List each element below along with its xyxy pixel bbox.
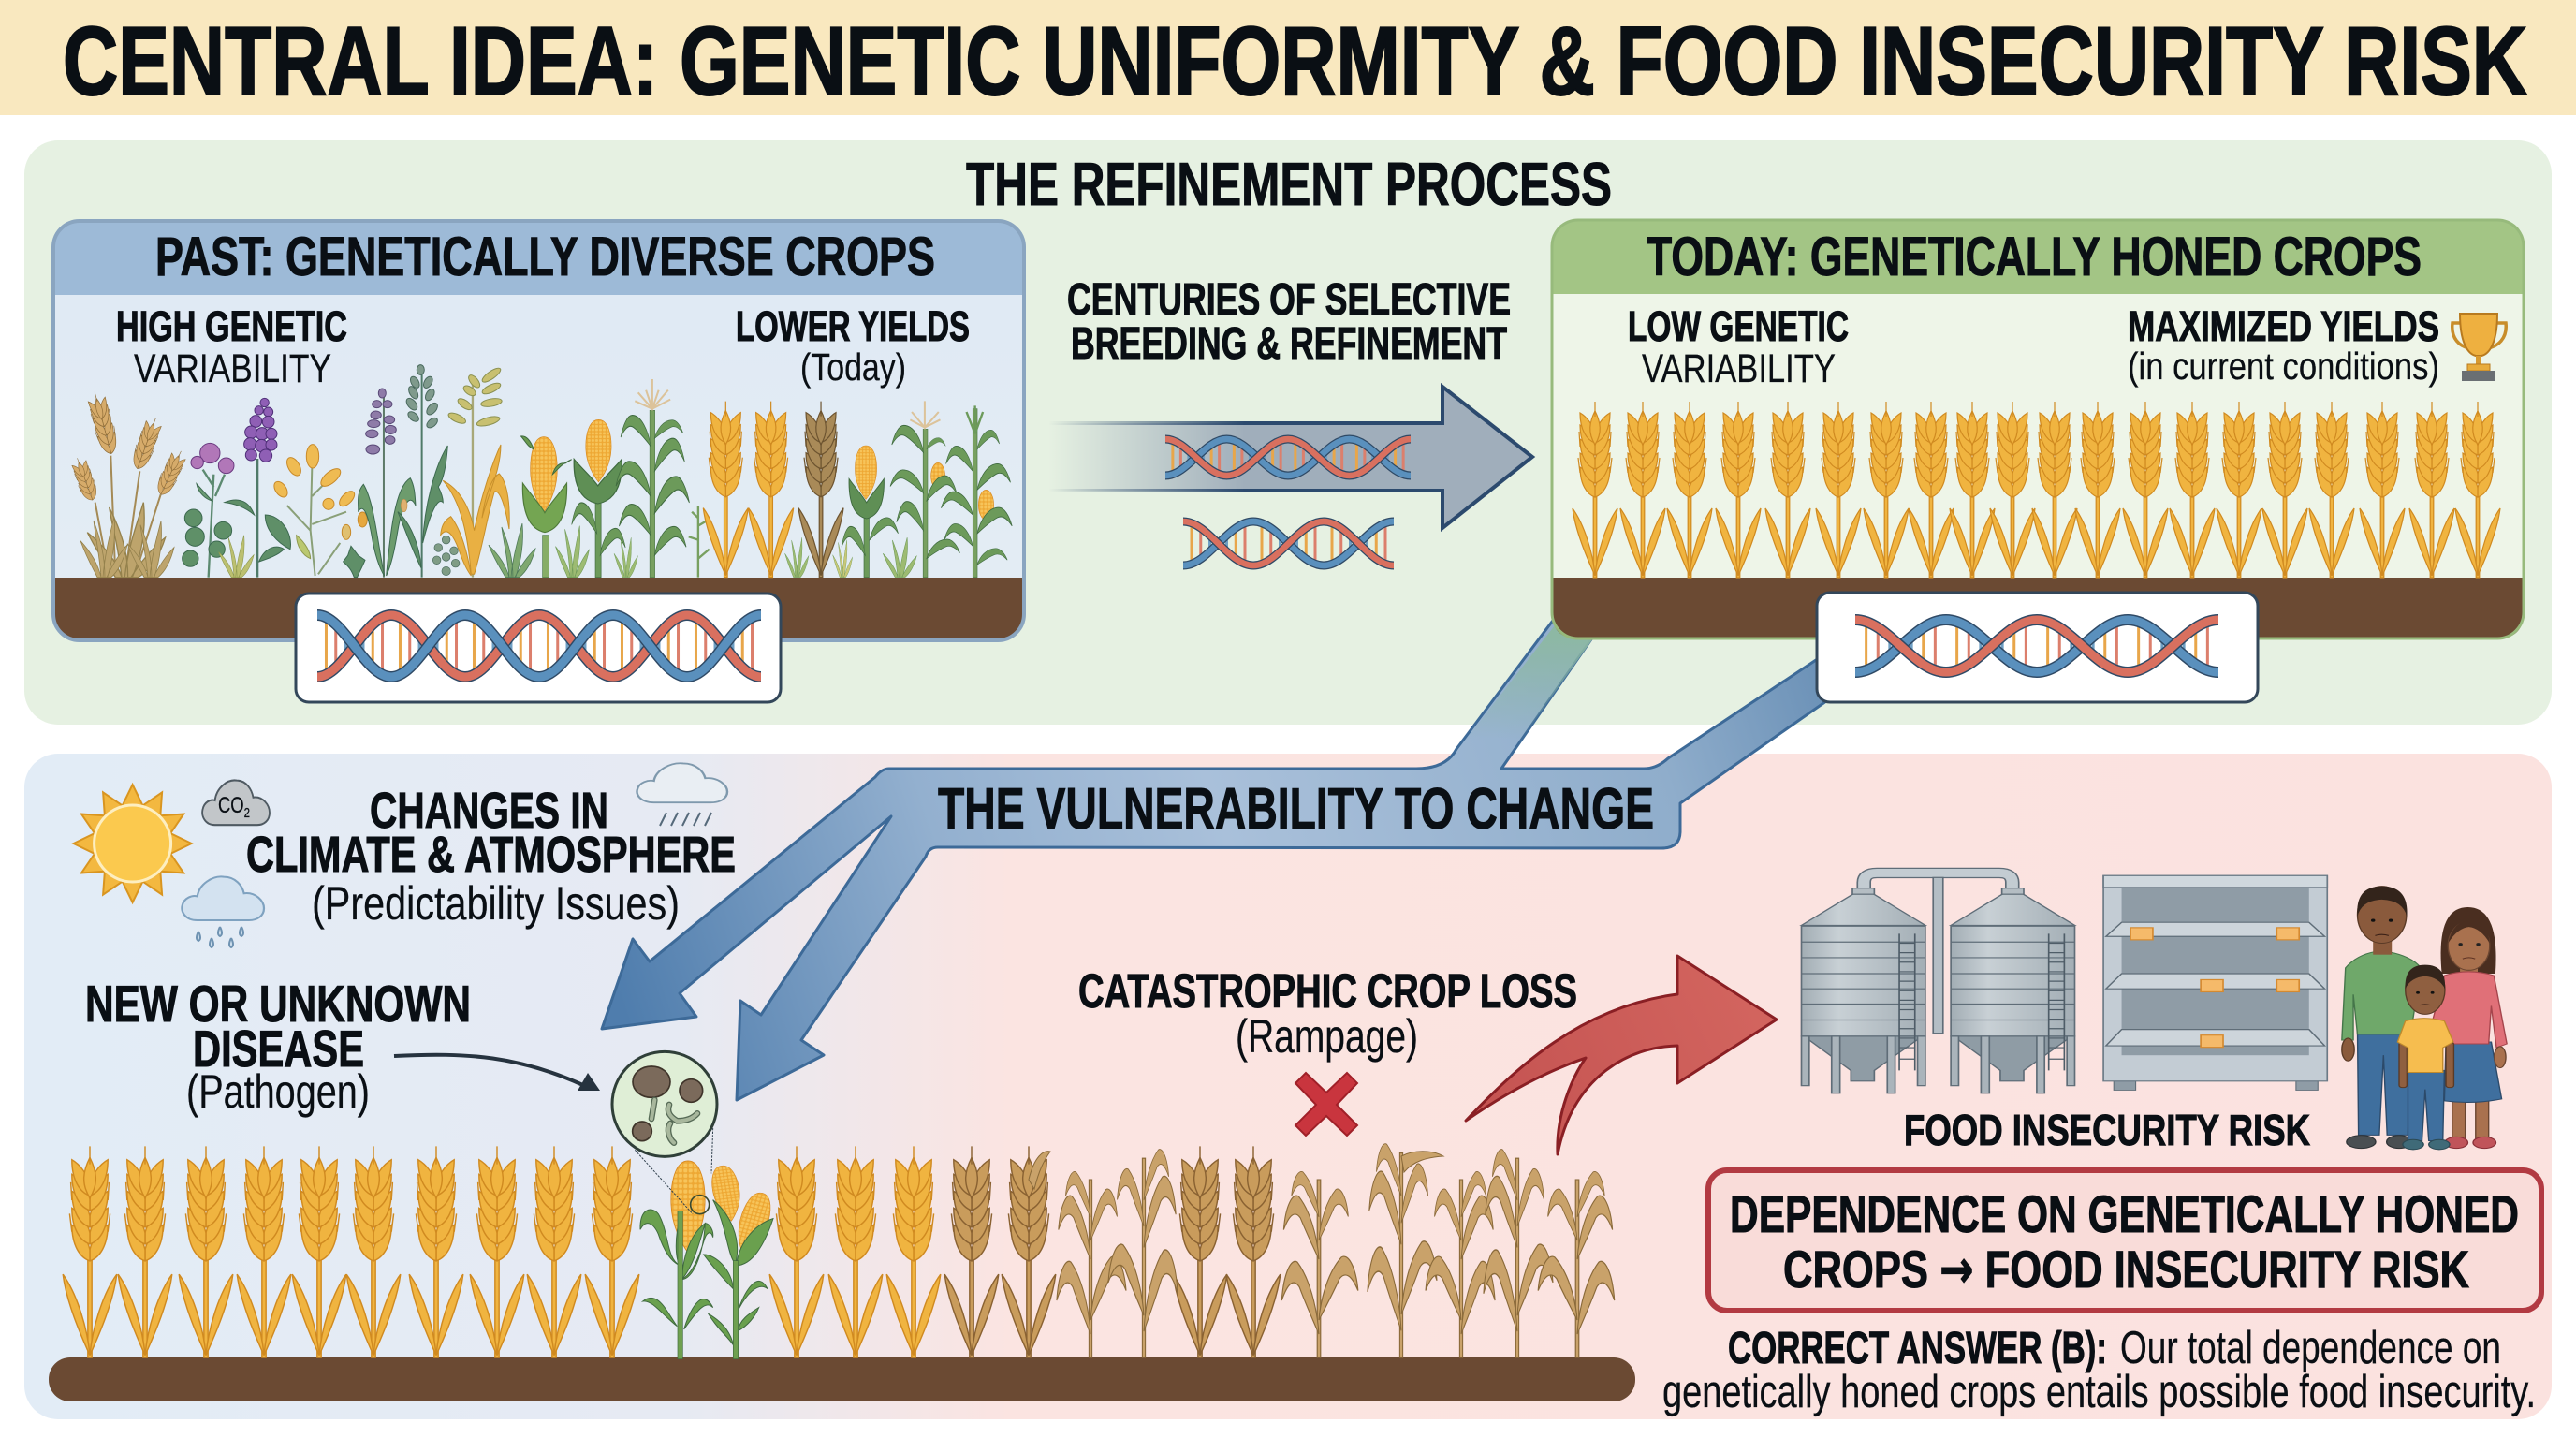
label: new or unknown disease: DISEASE (193, 1020, 364, 1078)
maximized yields label: (in current conditions) (2128, 345, 2439, 388)
icon: sun (74, 785, 192, 902)
arrow: the vulnerability to change (602, 618, 1835, 1100)
lower yields label: (Today) (800, 345, 906, 389)
high genetic variability label: HIGH GENETIC (116, 302, 347, 350)
boy (2397, 965, 2453, 1150)
label: food insecurity risk: FOOD INSECURITY RISK (1904, 1106, 2310, 1154)
healthy wheat row (63, 1146, 941, 1357)
panel: today genetically honed crops (1552, 220, 2524, 702)
infected spot (691, 1196, 710, 1214)
arrow: refinement (1048, 387, 1532, 528)
dna helix: diverse (317, 615, 761, 677)
diverse plants right group (521, 379, 1012, 578)
panel: past genetically diverse crops (53, 221, 1024, 702)
lower yields label: LOWER YIELDS (736, 302, 970, 350)
icon: pathogen magnifier (612, 1051, 717, 1156)
corn plant with tassel and side cob (890, 401, 959, 578)
corn plant small cob (842, 446, 899, 578)
browning wheat (944, 1146, 1281, 1357)
label: new or unknown disease: (Pathogen) (186, 1065, 370, 1118)
dashed zoom lines (635, 1128, 713, 1214)
icon: CO2 cloud: 2 (244, 805, 250, 821)
tall corn plant with tassel (616, 379, 689, 578)
label: changes in climate and atmosphere (246, 783, 736, 930)
icon: CO2 cloud: CO (218, 793, 252, 818)
label: new or unknown disease (85, 975, 471, 1118)
dna helix: uniform (1855, 620, 2218, 672)
arrow: crop loss to food insecurity (1466, 956, 1777, 1154)
low genetic variability label (1628, 302, 1849, 391)
low genetic variability label: VARIABILITY (1642, 346, 1836, 391)
icon: rain cloud blue (182, 876, 264, 947)
label: centuries of selective breeding: CENTURIES OF SELECTIVE (1067, 275, 1511, 325)
grass tufts (555, 526, 916, 578)
high genetic variability label: VARIABILITY (134, 346, 331, 391)
label: catastrophic crop loss: (Rampage) (1236, 1010, 1418, 1063)
dna helix: in arrow (1165, 439, 1411, 476)
icon: red x (1295, 1073, 1357, 1136)
past header text: PAST: GENETICALLY DIVERSE CROPS (155, 227, 935, 287)
purple tall flower (225, 398, 290, 578)
icon: grain silos (1801, 873, 2075, 1093)
icon: rain cloud light (637, 763, 727, 826)
icon: CO2 cloud (202, 780, 270, 825)
tiny seedling (689, 506, 710, 578)
dna helix: below arrow (1183, 521, 1394, 565)
corn plant tall thin (941, 405, 1012, 578)
label: centuries of selective breeding (1067, 275, 1511, 369)
arrow banner label: THE VULNERABILITY TO CHANGE (938, 777, 1654, 842)
label: changes in climate and atmosphere: CHANGES IN (370, 783, 608, 839)
dna card: past (296, 594, 781, 702)
purple grain and green leaves (359, 365, 460, 578)
text block: correct answer: CORRECT ANSWER (B): (1728, 1324, 2107, 1373)
icon: nearly empty shelves (2103, 875, 2327, 1091)
high genetic variability label (116, 302, 347, 391)
label: changes in climate and atmosphere: CLIMATE & ATMOSPHERE (246, 827, 736, 883)
maximized yields label: MAXIMIZED YIELDS (2128, 302, 2439, 350)
corn plant with orange cob (572, 419, 625, 578)
label: changes in climate and atmosphere: (Predictability Issues) (312, 877, 680, 930)
label: catastrophic crop loss (1078, 964, 1577, 1063)
dna card: today (1817, 593, 2258, 702)
soil strip: lower field (49, 1357, 1635, 1401)
yellow flowering plant (271, 445, 367, 578)
corn plants with pathogen (635, 1128, 776, 1359)
golden wheat pair (703, 402, 794, 578)
tan wheat bunch (69, 389, 189, 578)
icon: family (2342, 887, 2507, 1150)
panel: vulnerability background (24, 754, 2552, 1419)
heading: the refinement process: THE REFINEMENT PROCESS (966, 150, 1612, 218)
panel: refinement process background (24, 140, 2552, 725)
label: centuries of selective breeding: BREEDING & REFINEMENT (1071, 319, 1507, 369)
label: new or unknown disease: NEW OR UNKNOWN (85, 975, 471, 1033)
lower yields label (736, 302, 970, 389)
green grass tuft (489, 523, 535, 578)
woman (2431, 907, 2507, 1149)
diverse plants left group (69, 365, 535, 578)
arrow: disease to pathogen (394, 1055, 600, 1091)
man (2342, 887, 2421, 1149)
label: catastrophic crop loss: CATASTROPHIC CROP LOSS (1078, 964, 1577, 1018)
callout: dependence on honed crops (1708, 1170, 2541, 1311)
uniform wheat row (1573, 402, 2500, 578)
low genetic variability label: LOW GENETIC (1628, 302, 1849, 350)
brown wheat (798, 402, 843, 578)
purple clover plant (183, 443, 254, 578)
withered crops (1029, 1144, 1615, 1357)
corn plant with large cob (521, 436, 572, 578)
title banner (0, 0, 2576, 116)
yellow grass stalk (441, 366, 509, 578)
maximized yields label (2128, 302, 2439, 388)
text block: correct answer (1662, 1323, 2536, 1417)
icon: trophy (2452, 314, 2506, 381)
